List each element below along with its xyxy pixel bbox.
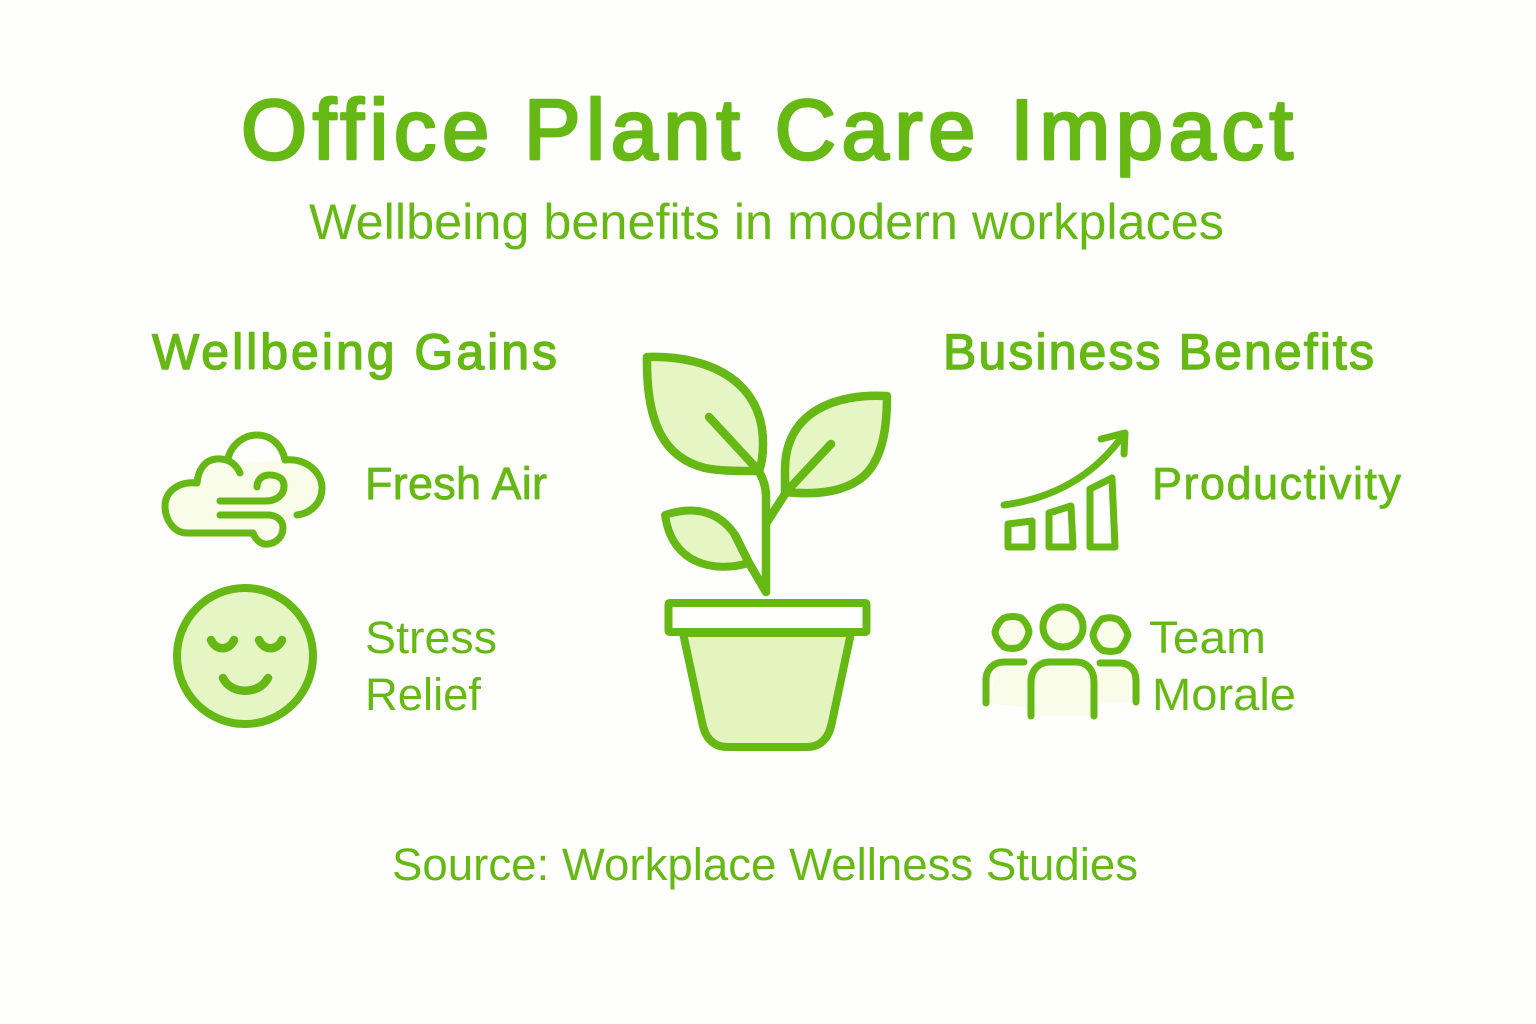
icon: relaxed smiling face: [177, 588, 313, 724]
icon: team of people: [986, 607, 1136, 716]
big leaf: [647, 357, 763, 471]
label: stress relief: Relief: [365, 669, 481, 720]
heading: business benefits: Business Benefits: [943, 324, 1374, 380]
source note: Source: Workplace Wellness Studies: [392, 839, 1138, 890]
subtitle: Wellbeing benefits in modern workplaces: [309, 194, 1224, 250]
label: productivity: Productivity: [1152, 458, 1402, 509]
icon: potted plant: [647, 357, 887, 747]
panel: wellbeing gains: [152, 324, 557, 724]
panel: business benefits: [943, 324, 1402, 720]
icon: cloud with wind: [165, 435, 322, 544]
label: team morale: Morale: [1152, 669, 1296, 720]
pot rim: [668, 603, 866, 632]
title: Office Plant Care Impact: [241, 83, 1293, 178]
label: team morale: Team: [1149, 612, 1266, 663]
small leaf: [665, 511, 749, 567]
heading: wellbeing gains: Wellbeing Gains: [152, 324, 557, 380]
label: fresh air: Fresh Air: [365, 458, 547, 509]
right leaf: [785, 396, 887, 493]
icon: growth chart: [1004, 433, 1125, 547]
stem and veins: [709, 417, 831, 592]
label: stress relief: Stress: [365, 612, 497, 663]
pot body: [683, 633, 851, 747]
